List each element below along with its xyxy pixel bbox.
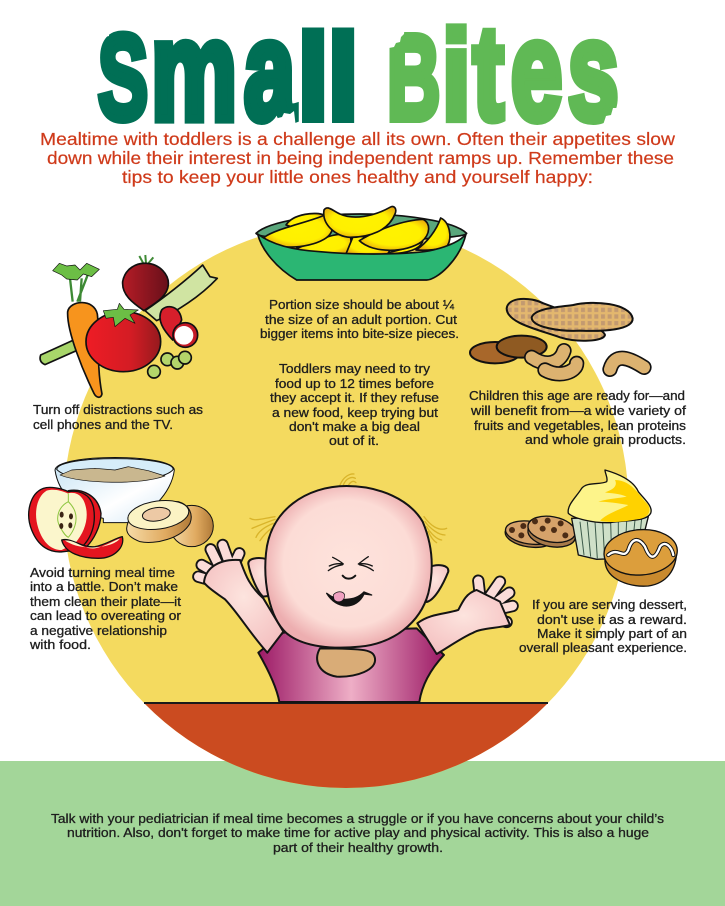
text: distractions: Turn off distractions such as	[33, 403, 203, 417]
text: meal time battle: a negative relationship	[30, 624, 167, 638]
text: toddlers try food: a new food, keep trying but	[272, 406, 439, 420]
title: B	[386, 9, 440, 145]
icon: bowl of banana slices	[256, 207, 467, 280]
text: portion size	[260, 298, 459, 341]
illustration: smiling baby	[198, 474, 513, 702]
icon: vegetables	[40, 255, 217, 397]
text: toddlers try food: food up to 12 times before	[275, 377, 434, 391]
intro paragraph	[40, 129, 675, 187]
text: distractions	[33, 403, 203, 432]
text: meal time battle: into a battle. Don’t make	[30, 580, 178, 594]
yellow circle background	[64, 223, 628, 788]
text: meal time battle: with food.	[29, 638, 91, 652]
text: meal time battle: can lead to overeating or	[30, 609, 181, 623]
text: variety of foods: will benefit from—a wide variety of	[470, 404, 687, 418]
title: S	[98, 9, 148, 145]
text: dessert: don't use it as a reward.	[537, 613, 687, 627]
title: i	[442, 5, 470, 146]
intro paragraph: down while their interest in being independent ramps up. Remember these	[47, 148, 674, 168]
text: variety of foods: Children this age are ready for—and	[469, 389, 685, 403]
baby bib	[317, 648, 375, 677]
baby head	[265, 486, 432, 648]
text: toddlers try food: don't make a big deal	[289, 420, 420, 434]
text: dessert: If you are serving dessert,	[532, 598, 687, 612]
text: variety of foods: fruits and vegetables, lean proteins	[474, 419, 686, 433]
text: meal time battle: Avoid turning meal time	[30, 566, 175, 580]
text: dessert: Make it simply part of an	[537, 627, 687, 641]
title: t	[473, 0, 503, 148]
text: footer note: Talk with your pediatrician if meal time becomes a struggle or if you have concerns about your child’s	[51, 812, 664, 826]
baby hair	[250, 474, 447, 543]
text: footer note	[51, 812, 664, 855]
green footer band	[0, 761, 725, 906]
text: portion size: the size of an adult portion. Cut	[265, 313, 458, 327]
text: variety of foods	[469, 389, 687, 447]
icon: oatmeal bowl, apple and bagel	[29, 457, 213, 558]
text: footer note: nutrition. Also, don't forget to make time for active play and physical activity. This is also a huge	[67, 826, 649, 840]
intro paragraph: Mealtime with toddlers is a challenge all its own. Often their appetites slow	[40, 129, 675, 149]
text: meal time battle	[29, 566, 182, 652]
text: portion size: Portion size should be about ¼	[269, 298, 455, 312]
text: dessert: overall pleasant experience.	[519, 641, 687, 655]
baby shirt	[258, 628, 444, 702]
title: l	[298, 9, 328, 145]
baby left arm and hand	[198, 545, 283, 653]
text: variety of foods: and whole grain products.	[525, 433, 686, 447]
red-orange table	[144, 703, 548, 788]
baby face	[327, 557, 373, 606]
text: toddlers try food: Toddlers may need to try	[279, 362, 431, 376]
title	[97, 0, 618, 149]
text: portion size: bigger items into bite-size pieces.	[260, 327, 459, 341]
baby right arm and hand	[417, 581, 513, 654]
text: toddlers try food: out of it.	[329, 434, 379, 448]
icon: nuts	[470, 299, 644, 374]
text: toddlers try food	[270, 362, 439, 448]
intro paragraph: tips to keep your little ones healthy and yourself happy:	[122, 167, 593, 187]
baby ears	[248, 558, 275, 597]
text: toddlers try food: they accept it. If they refuse	[270, 391, 439, 405]
text: dessert	[519, 598, 687, 655]
text: distractions: cell phones and the TV.	[33, 418, 173, 432]
text: footer note: part of their healthy growth.	[273, 841, 443, 855]
text: meal time battle: them clean their plate—it	[30, 595, 182, 609]
icon: cookies, cupcake and dessert	[504, 470, 679, 586]
title: l	[328, 9, 358, 145]
